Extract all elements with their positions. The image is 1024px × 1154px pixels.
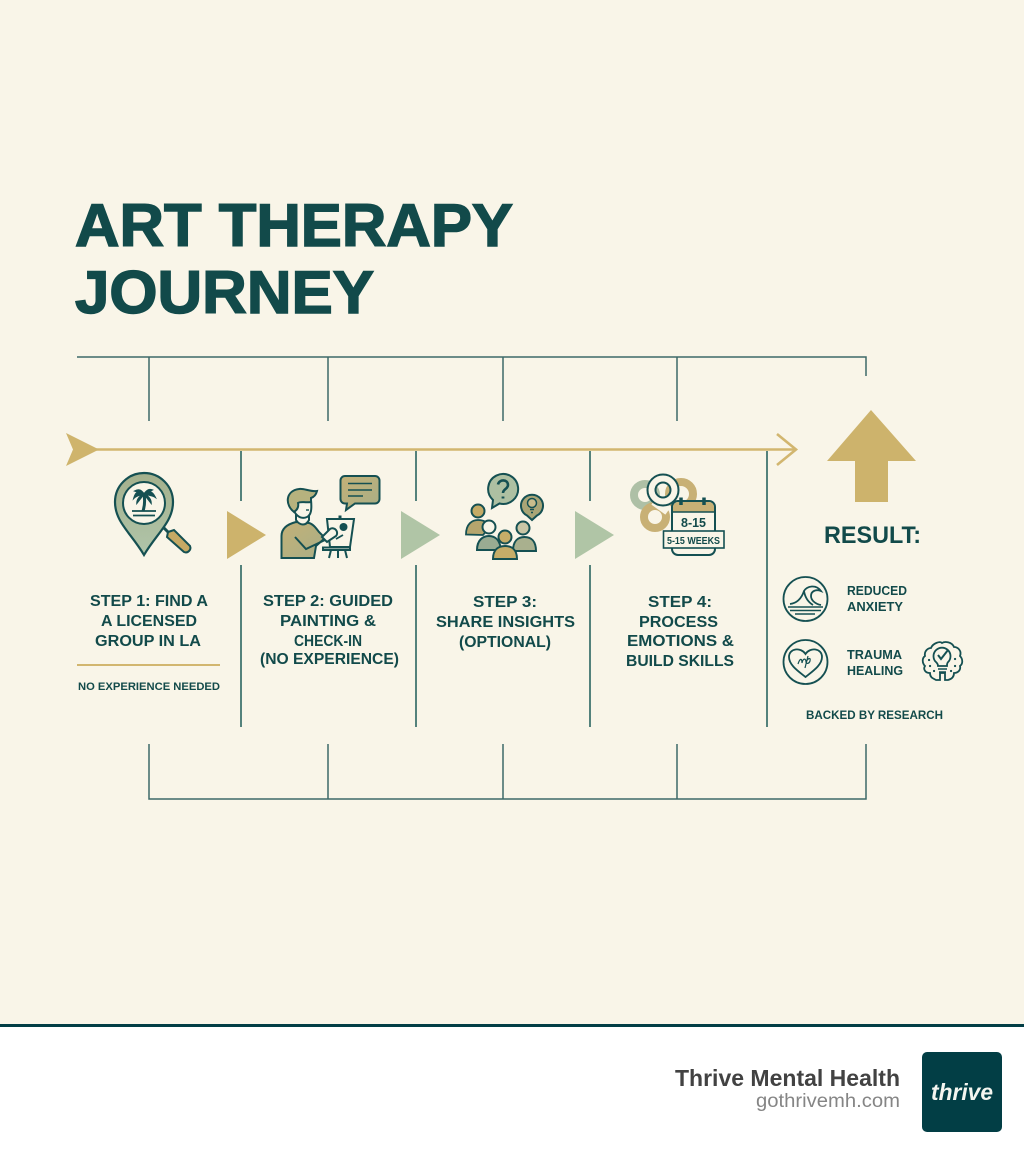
arrow: result up arrow — [827, 410, 916, 502]
result heading: RESULT: — [824, 522, 921, 549]
arrow: step 3 to step 4 — [575, 511, 614, 559]
step 4 text: PROCESS — [639, 614, 718, 631]
column dividers — [241, 451, 767, 727]
timeline arrow — [66, 433, 796, 466]
step 2 text — [260, 593, 399, 668]
result: reduced anxiety — [784, 577, 907, 621]
step 3 text — [436, 594, 575, 651]
icon: brain with lightbulb check — [923, 642, 962, 680]
step 1 text — [77, 593, 220, 693]
icon: wave — [784, 577, 828, 621]
step 3 text: SHARE INSIGHTS — [436, 614, 575, 631]
icon: linked rings and calendar: 5-15 WEEKS — [667, 536, 720, 547]
step 4 text: EMOTIONS & — [627, 633, 734, 650]
icon: map pin with palm and magnifier — [115, 473, 190, 555]
step 2 text: PAINTING & — [280, 613, 376, 630]
title: ART THERAPY — [75, 192, 513, 259]
icon: linked rings and calendar: 8-15 — [681, 515, 706, 530]
step 1 text: STEP 1: FIND A — [90, 593, 208, 610]
result: trauma healing — [784, 640, 903, 684]
result: trauma healing: TRAUMA — [847, 647, 903, 662]
step 2 text: STEP 2: GUIDED — [263, 593, 393, 610]
footer bar — [0, 1024, 1024, 1154]
top bracket lines — [77, 357, 866, 421]
result: reduced anxiety: ANXIETY — [847, 599, 903, 614]
icon: group sharing with questions — [466, 474, 543, 559]
step 1 text: NO EXPERIENCE NEEDED — [78, 681, 220, 693]
arrow: step 2 to step 3 — [401, 511, 440, 559]
result: trauma healing: HEALING — [847, 663, 903, 678]
icon: person painting with speech bubble — [282, 476, 380, 558]
footer brand text — [675, 1065, 900, 1112]
step 3 text: STEP 3: — [473, 594, 537, 611]
result: reduced anxiety: REDUCED — [847, 583, 907, 598]
footer logo: thrive — [931, 1079, 993, 1105]
step 1 text: GROUP IN LA — [95, 633, 201, 650]
title — [75, 192, 513, 326]
title: JOURNEY — [75, 259, 374, 326]
step 1 text: A LICENSED — [101, 613, 197, 630]
step 3 text: (OPTIONAL) — [459, 634, 551, 651]
step 4 text — [626, 594, 734, 670]
step 2 text: CHECK-IN — [294, 633, 362, 650]
icon: linked rings and calendar — [634, 474, 724, 555]
footer brand text: Thrive Mental Health — [675, 1065, 900, 1091]
backed by research note: BACKED BY RESEARCH — [806, 708, 943, 722]
step 2 text: (NO EXPERIENCE) — [260, 651, 399, 668]
bottom bracket lines — [149, 744, 866, 799]
footer brand text: gothrivemh.com — [756, 1091, 900, 1112]
icon: heart — [784, 640, 828, 684]
arrow: step 1 to step 2 — [227, 511, 266, 559]
step 4 text: BUILD SKILLS — [626, 653, 734, 670]
step 4 text: STEP 4: — [648, 594, 712, 611]
footer logo — [922, 1052, 1002, 1132]
